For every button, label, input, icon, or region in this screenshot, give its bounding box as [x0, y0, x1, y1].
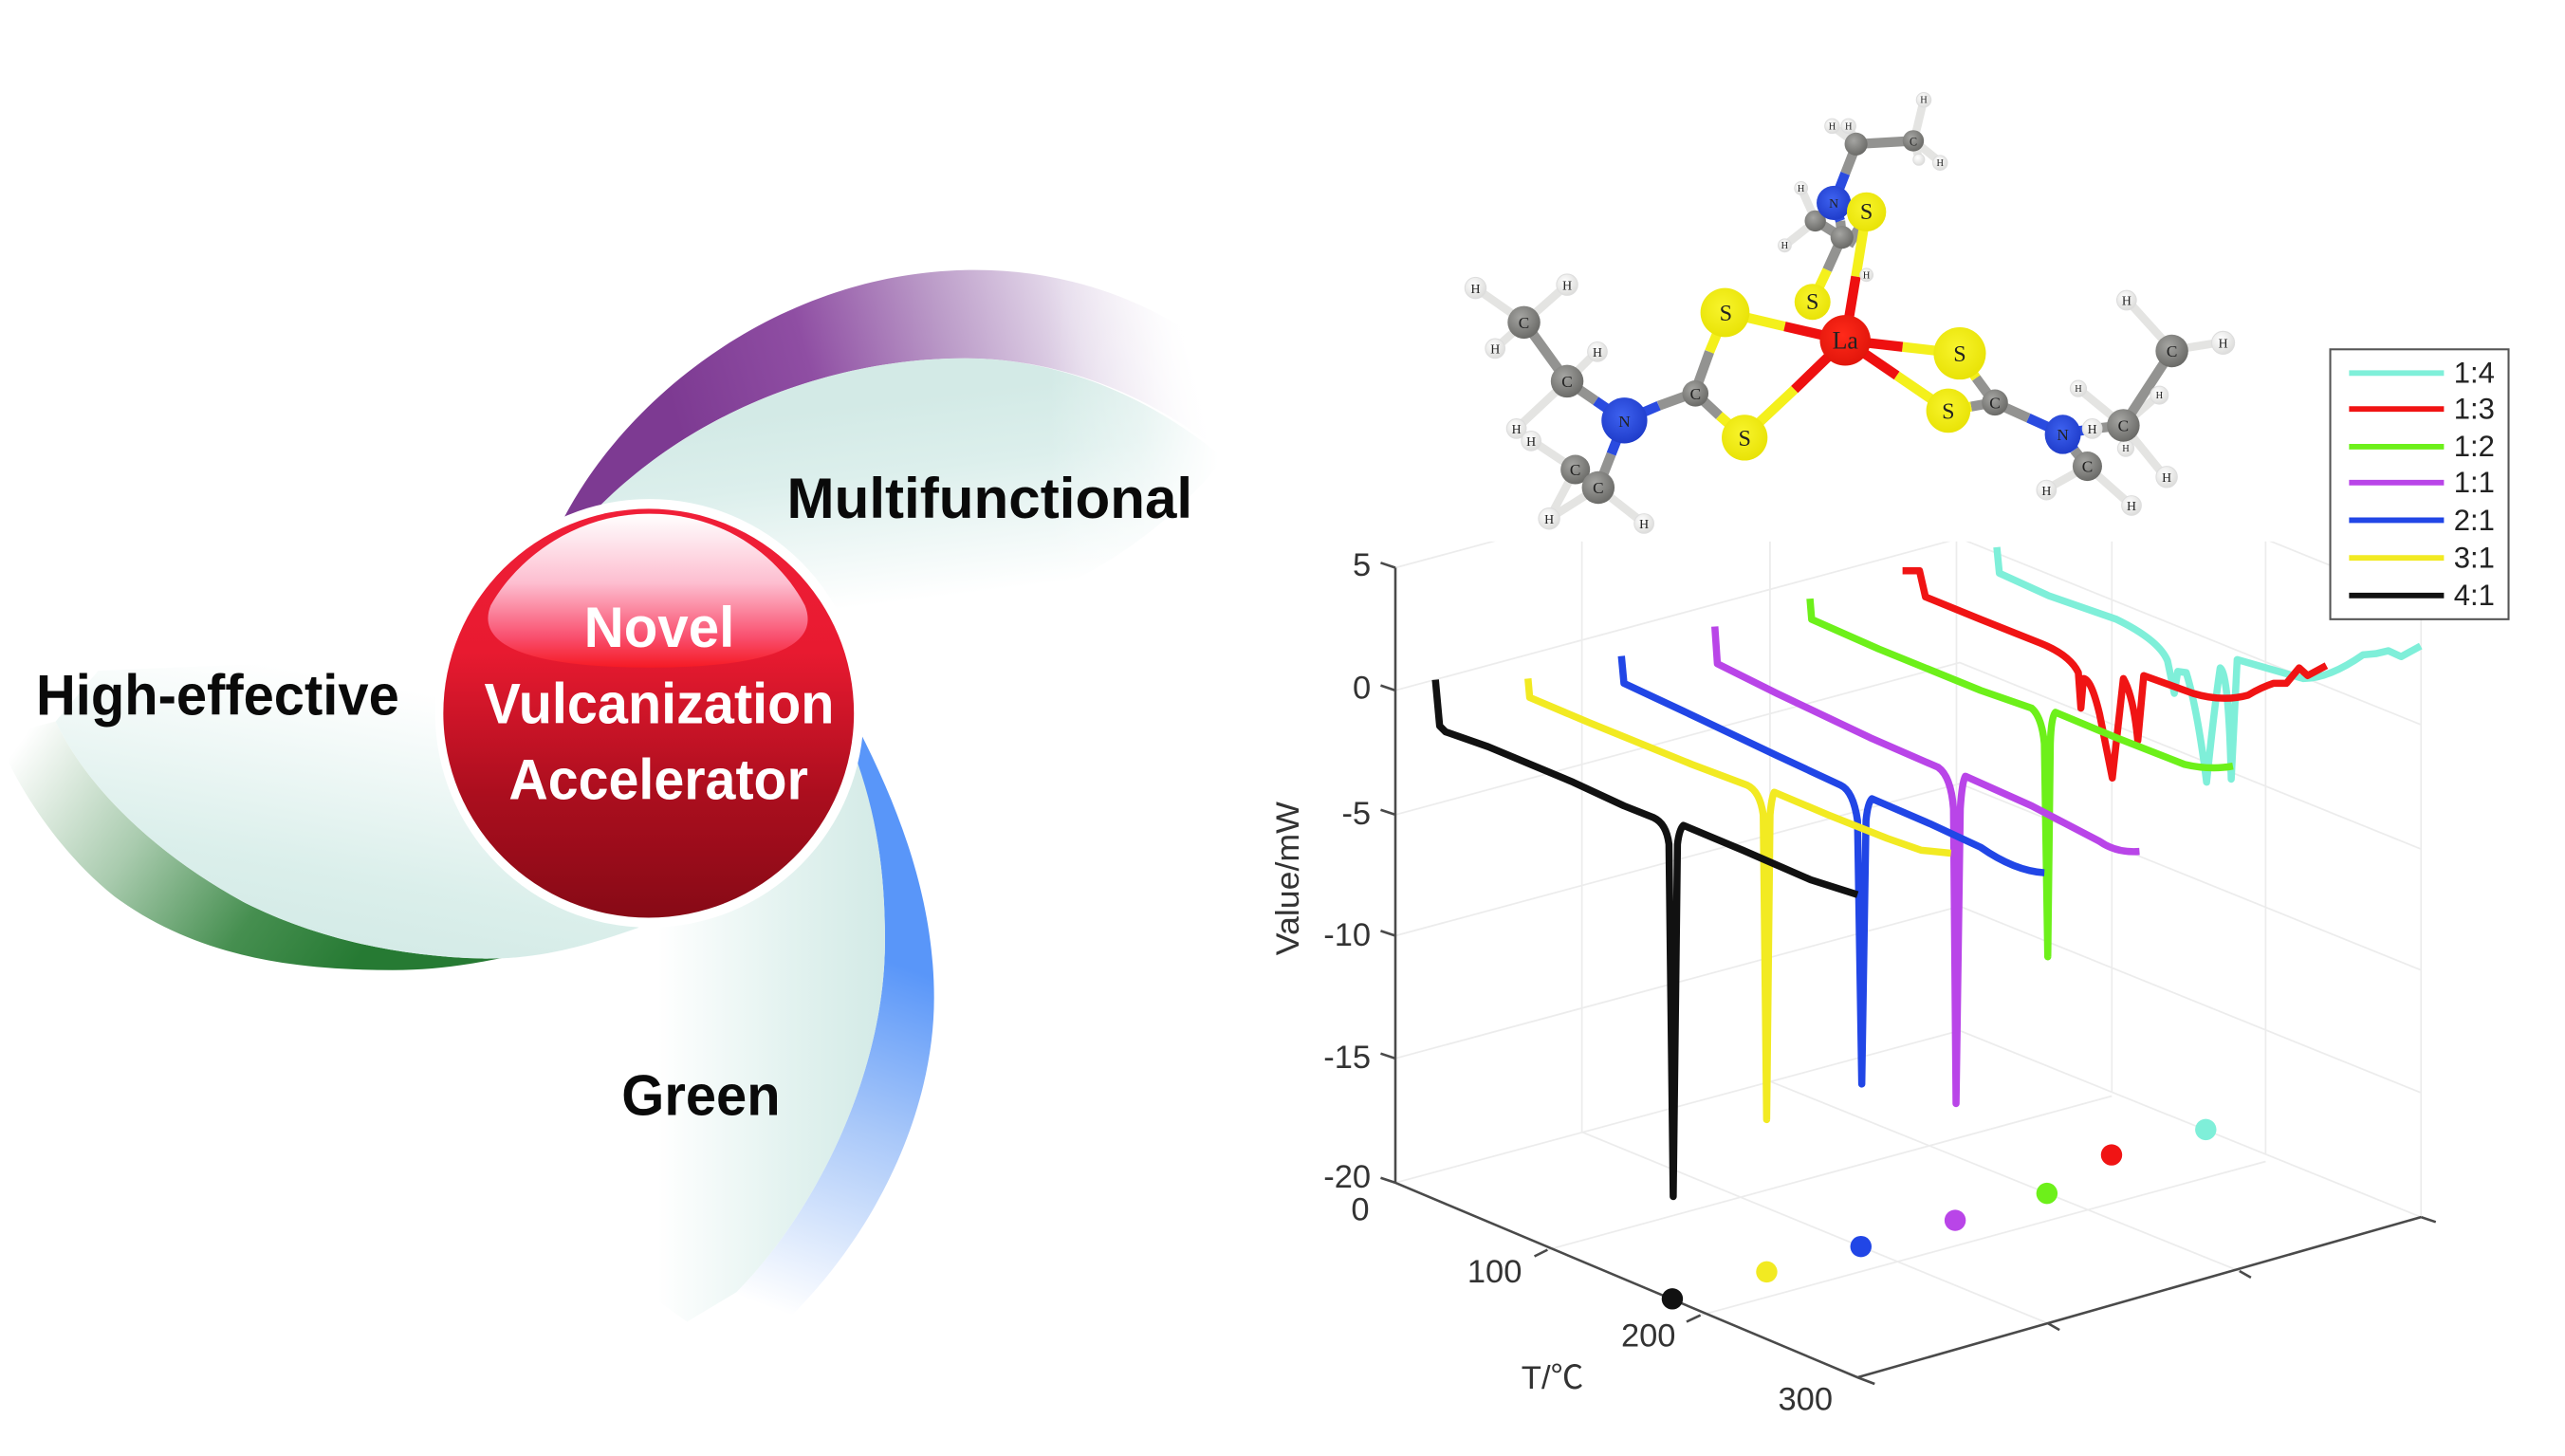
atom labels: S — [1738, 426, 1751, 452]
y axis labels: -5 — [1341, 796, 1371, 832]
legend — [2331, 349, 2509, 619]
sphere title: Accelerator — [508, 747, 808, 812]
atom labels: H — [1544, 512, 1554, 526]
atom labels: C — [2118, 417, 2129, 435]
molecule — [1465, 93, 2235, 533]
atom labels: H — [2088, 422, 2097, 436]
atom labels: H — [1490, 342, 1500, 357]
swirl: purple crescent — [564, 270, 1219, 517]
T axis labels: 0 — [1351, 1192, 1370, 1228]
atom labels: N — [1618, 413, 1631, 431]
sphere title: Vulcanization — [484, 671, 834, 735]
legend: 1:1 — [2454, 466, 2495, 499]
atom labels: H — [1526, 434, 1536, 449]
atom labels: C — [2082, 458, 2093, 476]
atom labels: C — [1690, 385, 1701, 403]
atom labels: H — [1829, 121, 1836, 132]
axis lines — [1380, 562, 2436, 1384]
curve 1:1 — [1715, 626, 2139, 1103]
atoms: nitrogen — [1601, 186, 2081, 454]
DSC curves — [1435, 547, 2421, 1196]
legend: 2:1 — [2454, 504, 2495, 537]
atom labels: C — [1593, 479, 1604, 497]
molecule bonds — [1475, 100, 2224, 524]
atom labels: H — [2127, 499, 2136, 513]
atoms: sulfur — [1701, 193, 1986, 461]
sphere title — [484, 595, 834, 812]
atoms: carbon — [1507, 130, 2188, 504]
heading: Green: Green — [621, 1062, 781, 1127]
y axis labels: -15 — [1323, 1040, 1371, 1076]
swirl diagram — [0, 262, 1251, 1321]
atom labels: C — [1989, 394, 2001, 412]
sphere body — [443, 508, 854, 918]
atom labels: H — [1798, 184, 1805, 194]
legend: 1:3 — [2454, 393, 2495, 426]
y axis labels: -10 — [1323, 917, 1371, 953]
atom labels: H — [1512, 422, 1522, 436]
atom labels: H — [1781, 241, 1789, 251]
y axis labels: -20 — [1323, 1159, 1371, 1195]
sphere gloss — [488, 514, 808, 668]
atom labels: H — [1937, 158, 1945, 169]
central red sphere — [435, 499, 864, 928]
atom labels: H — [2122, 444, 2130, 454]
atom labels: S — [1942, 399, 1955, 425]
atom labels: H — [2041, 484, 2051, 498]
atom labels: S — [1806, 289, 1818, 315]
T axis labels: 200 — [1621, 1318, 1675, 1354]
atom labels: C — [1561, 373, 1573, 391]
atom labels: H — [1593, 345, 1602, 359]
curve 3:1 — [1528, 678, 1951, 1119]
T axis labels: 100 — [1467, 1254, 1522, 1290]
atom labels: S — [1953, 341, 1966, 367]
atom labels: H — [1920, 96, 1928, 106]
sphere white ring — [435, 499, 864, 928]
legend: 1:4 — [2454, 357, 2495, 390]
T axis title: T/℃ — [1522, 1360, 1583, 1396]
atom labels: N — [2057, 426, 2069, 444]
curve 2:1 — [1621, 656, 2044, 1084]
atom labels: S — [1720, 301, 1732, 326]
atom labels: H — [1562, 278, 1572, 292]
plot axes and grid — [1380, 542, 2436, 1385]
y axis labels: 0 — [1353, 670, 1371, 706]
atom: lanthanum — [1819, 315, 1871, 366]
atom labels: C — [1570, 461, 1580, 479]
atom labels: La — [1833, 326, 1858, 354]
atom labels: H — [2162, 470, 2171, 485]
sample dots — [1662, 1119, 2217, 1310]
atom labels: H — [2075, 384, 2082, 395]
atom labels: H — [2156, 391, 2164, 401]
heading: High-effective: High-effective — [36, 663, 399, 728]
atom labels: C — [2167, 342, 2177, 360]
atom labels: H — [1845, 121, 1853, 132]
swirl: green petal — [638, 752, 885, 1321]
legend: 1:2 — [2454, 430, 2495, 463]
swirl: blue crescent — [736, 729, 934, 1321]
atom labels: H — [2122, 294, 2131, 308]
atom labels: H — [1863, 270, 1871, 281]
atom labels: C — [1910, 136, 1917, 149]
sphere title: Novel — [584, 595, 734, 659]
y axis title: Value/mW — [1270, 802, 1306, 955]
curve 4:1 — [1435, 680, 1857, 1196]
T axis labels: 300 — [1779, 1382, 1833, 1418]
atom labels: H — [2219, 337, 2228, 351]
curve 1:3 — [1903, 571, 2326, 778]
curve 1:2 — [1810, 599, 2233, 957]
atom labels — [1471, 96, 2228, 531]
y axis labels — [1323, 547, 1371, 1195]
atom labels: C — [1519, 314, 1529, 332]
legend: 3:1 — [2454, 541, 2495, 574]
y axis labels: 5 — [1353, 547, 1371, 583]
swirl: high-effective petal — [56, 654, 687, 959]
T axis labels — [1351, 1192, 1833, 1418]
legend: 4:1 — [2454, 579, 2495, 612]
curve 1:4 — [1997, 547, 2421, 783]
atom labels: H — [1639, 517, 1649, 531]
atom labels: S — [1860, 199, 1873, 225]
heading: Multifunctional: Multifunctional — [786, 466, 1192, 530]
atoms: hydrogen — [1465, 93, 2235, 533]
swirl: right fade — [1047, 262, 1251, 638]
swirl: multifunctional petal — [592, 359, 1224, 630]
atom labels: H — [1471, 282, 1481, 296]
atom labels: N — [1829, 196, 1838, 211]
swirl: green crescent — [0, 722, 507, 970]
